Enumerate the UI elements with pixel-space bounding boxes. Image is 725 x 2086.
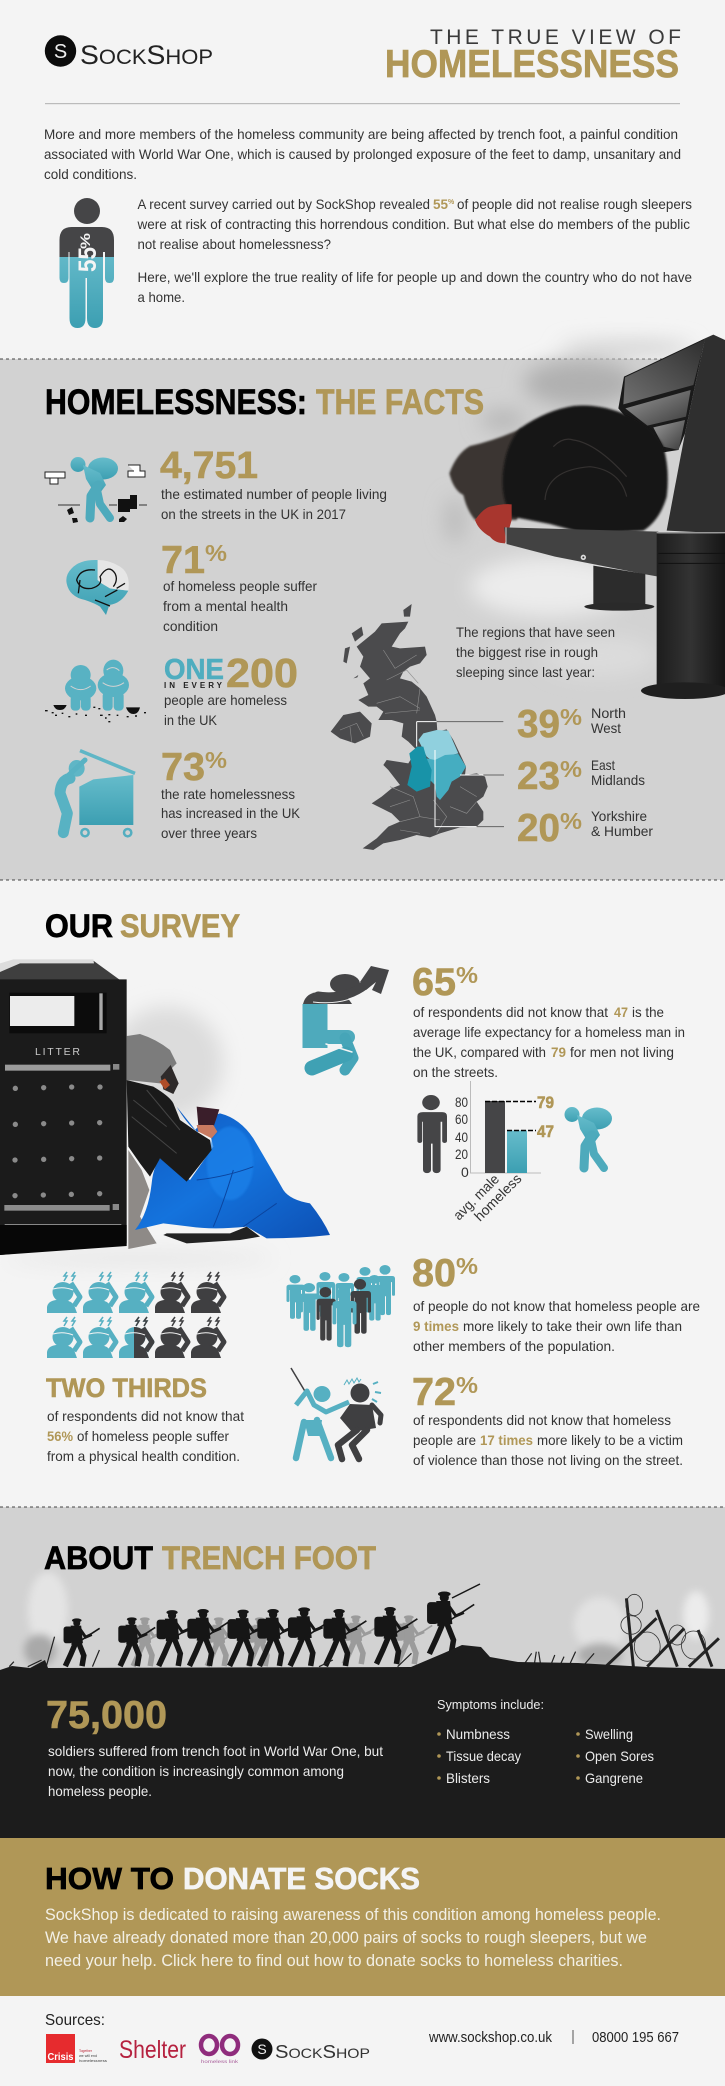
logo: Homeless Link: [201, 2036, 239, 2064]
regions intro text: sleeping since last year:: [456, 664, 595, 680]
heading: about trench foot: [44, 1540, 376, 1576]
symptoms list: Tissue decay: [446, 1748, 521, 1764]
stat: 71%: %: [205, 540, 227, 566]
stat: 80%: [412, 1252, 700, 1354]
stat: 72%: [412, 1371, 683, 1468]
heading: our survey: OUR: [45, 908, 113, 944]
stat: 80%: 9 times: [413, 1318, 459, 1334]
bar chart: life expectancy: 80: [455, 1094, 468, 1110]
donate text: need your help. Click here to find out how to donate socks to homeless charities.: [45, 1952, 623, 1970]
stat: two thirds: 56%: [47, 1428, 74, 1444]
stat: 4,751: [160, 445, 387, 522]
stat: 71%: [161, 539, 317, 634]
stat: 72%: of violence than those not living on the street.: [413, 1452, 683, 1468]
icon: man carrying bag on street: [45, 457, 147, 523]
logo: Crisis: homelessness: [79, 2059, 107, 2063]
icon: two seated people with bowls: [45, 660, 146, 722]
logo: SockShop small: [252, 2038, 370, 2062]
stat: 72%: more likely to be a victim: [537, 1432, 683, 1448]
intro text: cold conditions.: [44, 166, 137, 182]
survey intro text: Here, we'll explore the true reality of life for people up and down the country who do not have: [138, 269, 692, 285]
SockShop logo: [45, 35, 213, 70]
icon: 55% figure: 55: [74, 247, 102, 272]
panel: about trench foot: [0, 1507, 725, 1838]
symptoms list: Symptoms include:: [437, 1697, 544, 1712]
stat: 65%: 79: [551, 1044, 566, 1060]
logo: Shelter: Shelter: [119, 2036, 186, 2064]
donate text: We have already donated more than 20,000 pairs of socks to rough sleepers, but we: [45, 1929, 647, 1947]
logo: Homeless Link: homeless link: [201, 2059, 239, 2064]
survey intro text: not realise about homelessness?: [138, 236, 331, 252]
icon: person searching a bin: [60, 751, 135, 836]
stat: two thirds: of respondents did not know that: [47, 1408, 244, 1424]
stat: 75,000: now, the condition is increasingly common among: [48, 1763, 344, 1779]
stat: one in every 200: [164, 650, 298, 728]
title: HOMELESSNESS: [385, 43, 679, 86]
heading: homelessness the facts: THE FACTS: [316, 383, 484, 422]
bar chart: life expectancy: homeless: [471, 1170, 525, 1224]
heading: how to donate socks: [45, 1861, 420, 1896]
intro text: [44, 126, 681, 182]
stat: 20% Yorkshire and Humber: 20: [517, 807, 560, 850]
symptoms list: Swelling: [585, 1726, 633, 1742]
stat: 39% North West: [517, 703, 626, 746]
stat: 65%: average life expectancy for a homeless man in: [413, 1024, 685, 1040]
stat: 80%: other members of the population.: [413, 1338, 615, 1354]
stat: 23% East Midlands: [517, 755, 645, 798]
stat: 72%: %: [456, 1372, 478, 1398]
stat: 20% Yorkshire and Humber: [517, 807, 653, 850]
regions intro text: the biggest rise in rough: [456, 644, 598, 660]
icon: homeless man: [564, 1107, 612, 1168]
panel: how to donate socks: [0, 1838, 725, 1996]
survey intro text: a home.: [138, 289, 185, 305]
stat: 4,751: on the streets in the UK in 2017: [161, 506, 346, 522]
logo: SockShop small: SOCKSHOP: [275, 2042, 370, 2062]
survey intro text: [137, 196, 692, 305]
stat: 73%: 73: [161, 746, 205, 789]
heading: how to donate socks: HOW TO: [45, 1861, 174, 1896]
icon: violent attack: [291, 1368, 381, 1459]
stat: 65%: on the streets.: [413, 1064, 498, 1080]
stat: two thirds: TWO THIRDS: [46, 1373, 207, 1403]
stat: 20% Yorkshire and Humber: %: [560, 808, 582, 834]
stat: 75,000: 75,000: [46, 1694, 167, 1737]
stat: 20% Yorkshire and Humber: & Humber: [591, 823, 653, 839]
footer: sources: Sources:: [45, 2012, 105, 2029]
heading: about trench foot: TRENCH FOOT: [162, 1540, 376, 1576]
bar chart: life expectancy: 60: [455, 1111, 468, 1127]
stat: 23% East Midlands: Midlands: [591, 772, 645, 788]
survey intro text: A recent survey carried out by SockShop revealed: [138, 196, 430, 212]
survey intro text: were at risk of contracting this horrendous condition. But what else do members of the public: [137, 216, 690, 232]
stat: 20% Yorkshire and Humber: Yorkshire: [591, 808, 647, 824]
stat: 71%: from a mental health: [163, 598, 288, 614]
heading: about trench foot: ABOUT: [44, 1540, 153, 1576]
symptoms list: Blisters: [446, 1770, 490, 1786]
smoke: [24, 1572, 709, 1667]
stat: 73%: over three years: [161, 825, 257, 841]
stat: two thirds: from a physical health condition.: [47, 1448, 240, 1464]
SockShop logo: S: [54, 41, 67, 63]
stat: 72%: people are: [413, 1432, 476, 1448]
heading: how to donate socks: DONATE SOCKS: [183, 1861, 420, 1896]
logo: Crisis: Crisis: [48, 2051, 74, 2063]
stat: 71%: 71: [161, 539, 205, 582]
stat: 4,751: 4,751: [160, 445, 258, 487]
icon: average man: [417, 1095, 447, 1173]
heading: homelessness the facts: HOMELESSNESS:: [45, 383, 307, 422]
contact details: 08000 195 667: [592, 2030, 679, 2046]
stat: 39% North West: North: [591, 705, 626, 721]
regions intro text: The regions that have seen: [456, 624, 615, 640]
stat: 72%: 17 times: [480, 1432, 533, 1448]
heading: homelessness the facts: [45, 383, 484, 422]
heading: our survey: SURVEY: [120, 908, 240, 944]
stat: 65%: [412, 961, 685, 1080]
intro text: More and more members of the homeless community are being affected by trench foot, a painful condition: [44, 126, 678, 142]
bar chart: life expectancy: 47: [537, 1122, 554, 1141]
donate text: [45, 1906, 661, 1970]
stat: one in every 200: people are homeless: [164, 692, 287, 708]
stat: 80%: more likely to take their own life than: [463, 1318, 682, 1334]
stat: 65%: %: [456, 962, 478, 988]
stat: 80%: %: [456, 1253, 478, 1279]
contact details: www.sockshop.co.uk: [428, 2030, 553, 2046]
stat: 75,000: homeless people.: [48, 1783, 152, 1799]
symptoms list: Numbness: [446, 1726, 510, 1742]
intro text: associated with World War One, which is caused by prolonged exposure of the feet to damp, unsanitary and: [44, 146, 681, 162]
panel: homelessness the facts: [0, 335, 725, 880]
stat: 73%: the rate homelessness: [161, 786, 295, 802]
stat: one in every 200: in the UK: [164, 712, 218, 728]
stat: two thirds: of homeless people suffer: [77, 1428, 229, 1444]
stat: 65%: for men not living: [570, 1044, 674, 1060]
icon: ten people with pain: [47, 1272, 224, 1358]
stat: one in every 200: 200: [226, 650, 298, 696]
survey intro text: %: [448, 199, 455, 206]
stat: 39% North West: 39: [517, 703, 560, 746]
bar chart: life expectancy: 0: [461, 1164, 469, 1180]
stat: 80%: of people do not know that homeless people are: [413, 1298, 700, 1314]
stat: 23% East Midlands: %: [560, 756, 582, 782]
stat: 72%: 72: [412, 1371, 456, 1414]
survey intro text: 55: [433, 196, 448, 212]
stat: 65%: 47: [614, 1004, 628, 1020]
stat: 65%: the UK, compared with: [413, 1044, 546, 1060]
stat: 73%: [161, 746, 301, 841]
donate text: SockShop is dedicated to raising awareness of this condition among homeless people.: [45, 1906, 661, 1924]
header: [45, 26, 681, 86]
title: [385, 26, 681, 86]
icon: person holding arrow: [303, 966, 389, 1070]
regions intro text: [456, 624, 615, 680]
stat: 39% North West: West: [591, 720, 621, 736]
stat: 4,751: the estimated number of people living: [161, 486, 387, 502]
contact details: [428, 2030, 679, 2046]
survey intro text: of people did not realise rough sleepers: [457, 196, 692, 212]
illustration: soldiers silhouette: [64, 1584, 480, 1666]
bar chart: life expectancy: avg. male: [450, 1171, 502, 1223]
stat: one in every 200: ONE: [164, 654, 224, 686]
logo: Crisis: [46, 2034, 107, 2063]
icon: crowd of people: [286, 1265, 395, 1347]
stat: 71%: condition: [163, 618, 218, 634]
stat: 75,000: [46, 1694, 383, 1799]
stat: 75,000: soldiers suffered from trench foot in World War One, but: [48, 1743, 383, 1759]
icon: 55% figure: [60, 198, 114, 328]
photo: person seated by litter bin: [0, 959, 330, 1263]
icon: 55% figure: %: [77, 232, 93, 249]
stat: 65%: is the: [632, 1004, 664, 1020]
icon: brain: [66, 560, 129, 615]
black ground: [0, 1645, 725, 1838]
symptoms list: Gangrene: [585, 1770, 643, 1786]
bar chart: life expectancy: 40: [455, 1129, 468, 1145]
logo: Crisis: Together: [79, 2049, 93, 2053]
logo: Crisis: we will end: [79, 2054, 97, 2058]
map: UK regions: [331, 604, 504, 850]
title: THE TRUE VIEW OF: [430, 26, 681, 49]
stat: 80%: 80: [412, 1252, 456, 1295]
footer: sources: [45, 2012, 679, 2064]
photo: person seated by litter bin: LITTER: [35, 1046, 80, 1058]
panel: our survey: [0, 908, 700, 1468]
SockShop logo: SOCKSHOP: [80, 40, 213, 70]
bar chart: life expectancy: [417, 1081, 612, 1224]
illustration: barbed wire: [9, 1594, 719, 1667]
bar chart: life expectancy: 20: [455, 1146, 468, 1162]
stat: 39% North West: %: [560, 704, 582, 730]
stat: one in every 200: IN EVERY: [164, 681, 223, 690]
stat: 23% East Midlands: 23: [517, 755, 560, 798]
stat: 73%: has increased in the UK: [161, 805, 301, 821]
bar chart: life expectancy: 79: [537, 1093, 554, 1112]
stat: 23% East Midlands: East: [591, 757, 615, 773]
heading: our survey: [45, 908, 240, 944]
stat: 72%: of respondents did not know that homeless: [413, 1412, 671, 1428]
logo: SockShop small: S: [257, 2041, 267, 2057]
stat: 73%: %: [205, 747, 227, 773]
symptoms list: Open Sores: [585, 1748, 654, 1764]
photo: man sleeping on bench: [445, 335, 725, 699]
stat: 65%: 65: [412, 961, 456, 1004]
stat: 65%: of respondents did not know that: [413, 1004, 608, 1020]
stat: 71%: of homeless people suffer: [163, 578, 317, 594]
stat: two thirds: [46, 1373, 244, 1464]
symptoms list: [437, 1697, 654, 1786]
